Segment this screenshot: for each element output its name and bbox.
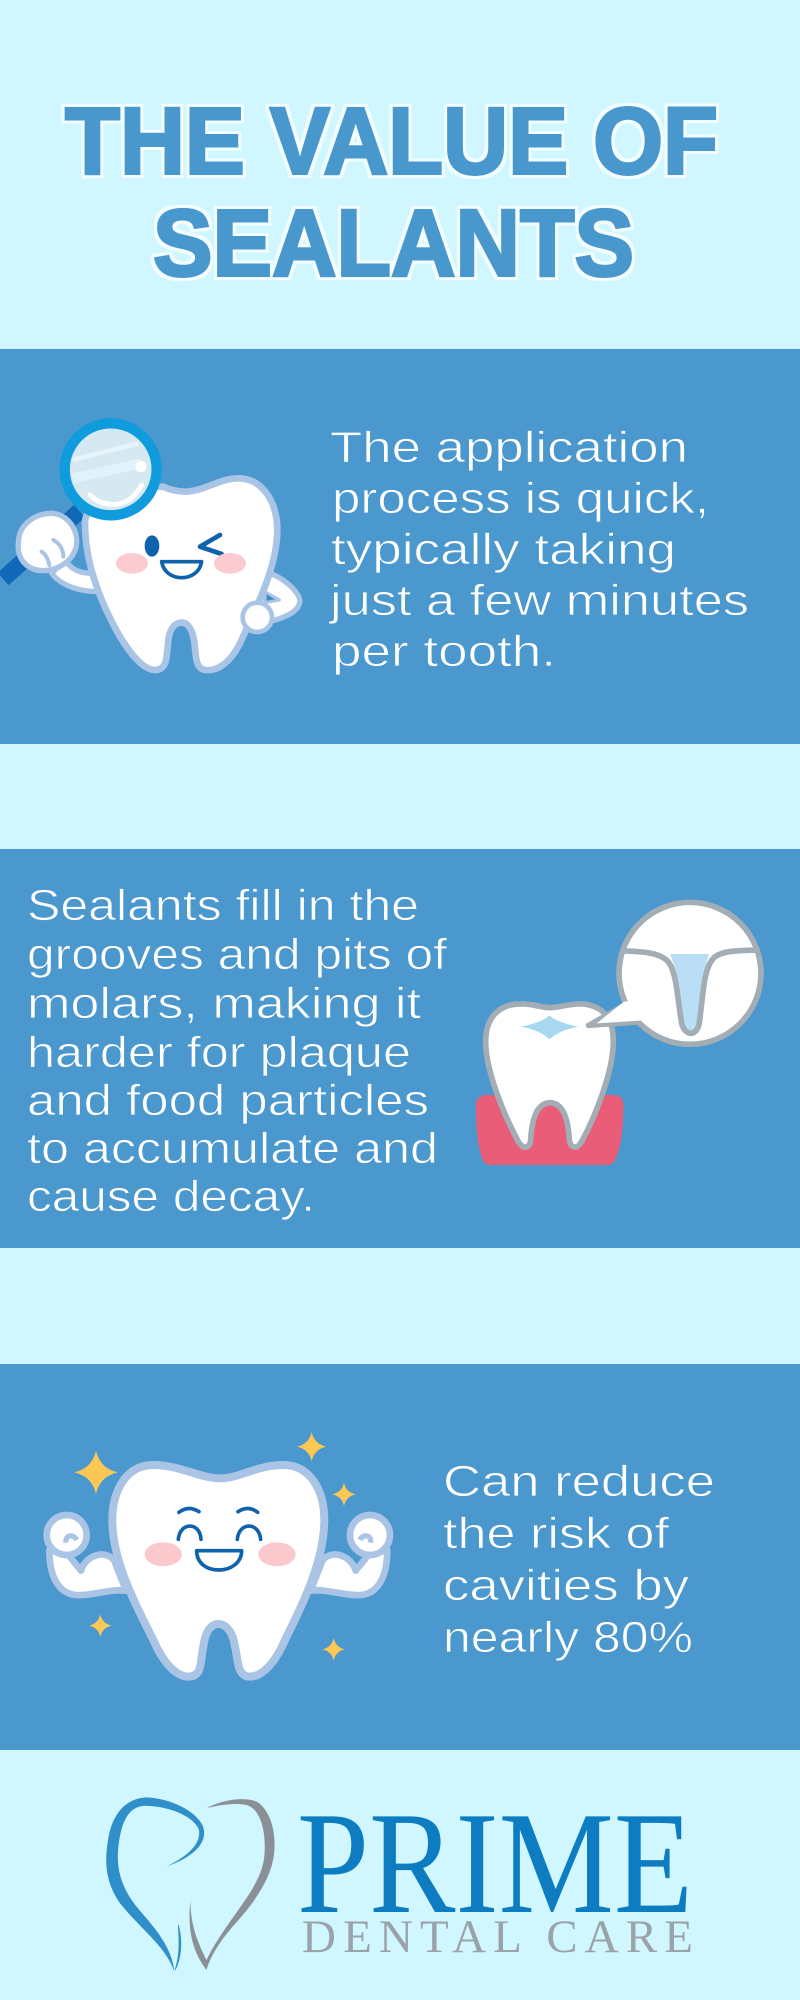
text: reduce cavities bbox=[443, 1457, 715, 1662]
title: THE VALUE OF bbox=[65, 88, 718, 194]
text: reduce cavities: nearly 80% bbox=[443, 1613, 693, 1662]
text: sealants fill grooves: Sealants fill in the bbox=[27, 881, 419, 930]
text: reduce cavities: cavities by bbox=[443, 1561, 689, 1610]
text: application process: process is quick, bbox=[332, 474, 709, 523]
icon: molar with sealant callout bbox=[476, 902, 761, 1165]
panel: grooves and pits bbox=[0, 849, 800, 1248]
text: sealants fill grooves: cause decay. bbox=[27, 1172, 315, 1221]
text: application process: just a few minutes bbox=[328, 576, 749, 625]
logo wordmark: PRIME bbox=[297, 1782, 693, 1944]
title: SEALANTS bbox=[153, 190, 634, 296]
icon: strong tooth with sparkles bbox=[47, 1432, 390, 1677]
text: sealants fill grooves: to accumulate and bbox=[27, 1124, 438, 1173]
icon: tooth outline mark bbox=[106, 1797, 275, 1972]
text: application process: typically taking bbox=[331, 525, 676, 574]
icon: tooth with magnifying glass bbox=[9, 423, 300, 670]
title bbox=[65, 88, 718, 296]
text: sealants fill grooves: grooves and pits of bbox=[27, 930, 448, 979]
panel: quick application bbox=[0, 349, 800, 744]
text: sealants fill grooves: harder for plaque bbox=[27, 1028, 411, 1077]
logo wordmark: DENTAL CARE bbox=[302, 1911, 693, 1963]
panel: cavity reduction bbox=[0, 1364, 800, 1750]
text: application process bbox=[328, 423, 749, 676]
text: sealants fill grooves bbox=[27, 881, 448, 1221]
text: application process: per tooth. bbox=[332, 627, 556, 676]
text: reduce cavities: the risk of bbox=[443, 1509, 670, 1558]
logo: Prime Dental Care bbox=[106, 1782, 693, 1972]
text: sealants fill grooves: and food particles bbox=[27, 1076, 429, 1125]
text: application process: The application bbox=[330, 423, 688, 472]
text: sealants fill grooves: molars, making it bbox=[27, 979, 421, 1028]
text: reduce cavities: Can reduce bbox=[443, 1457, 715, 1506]
